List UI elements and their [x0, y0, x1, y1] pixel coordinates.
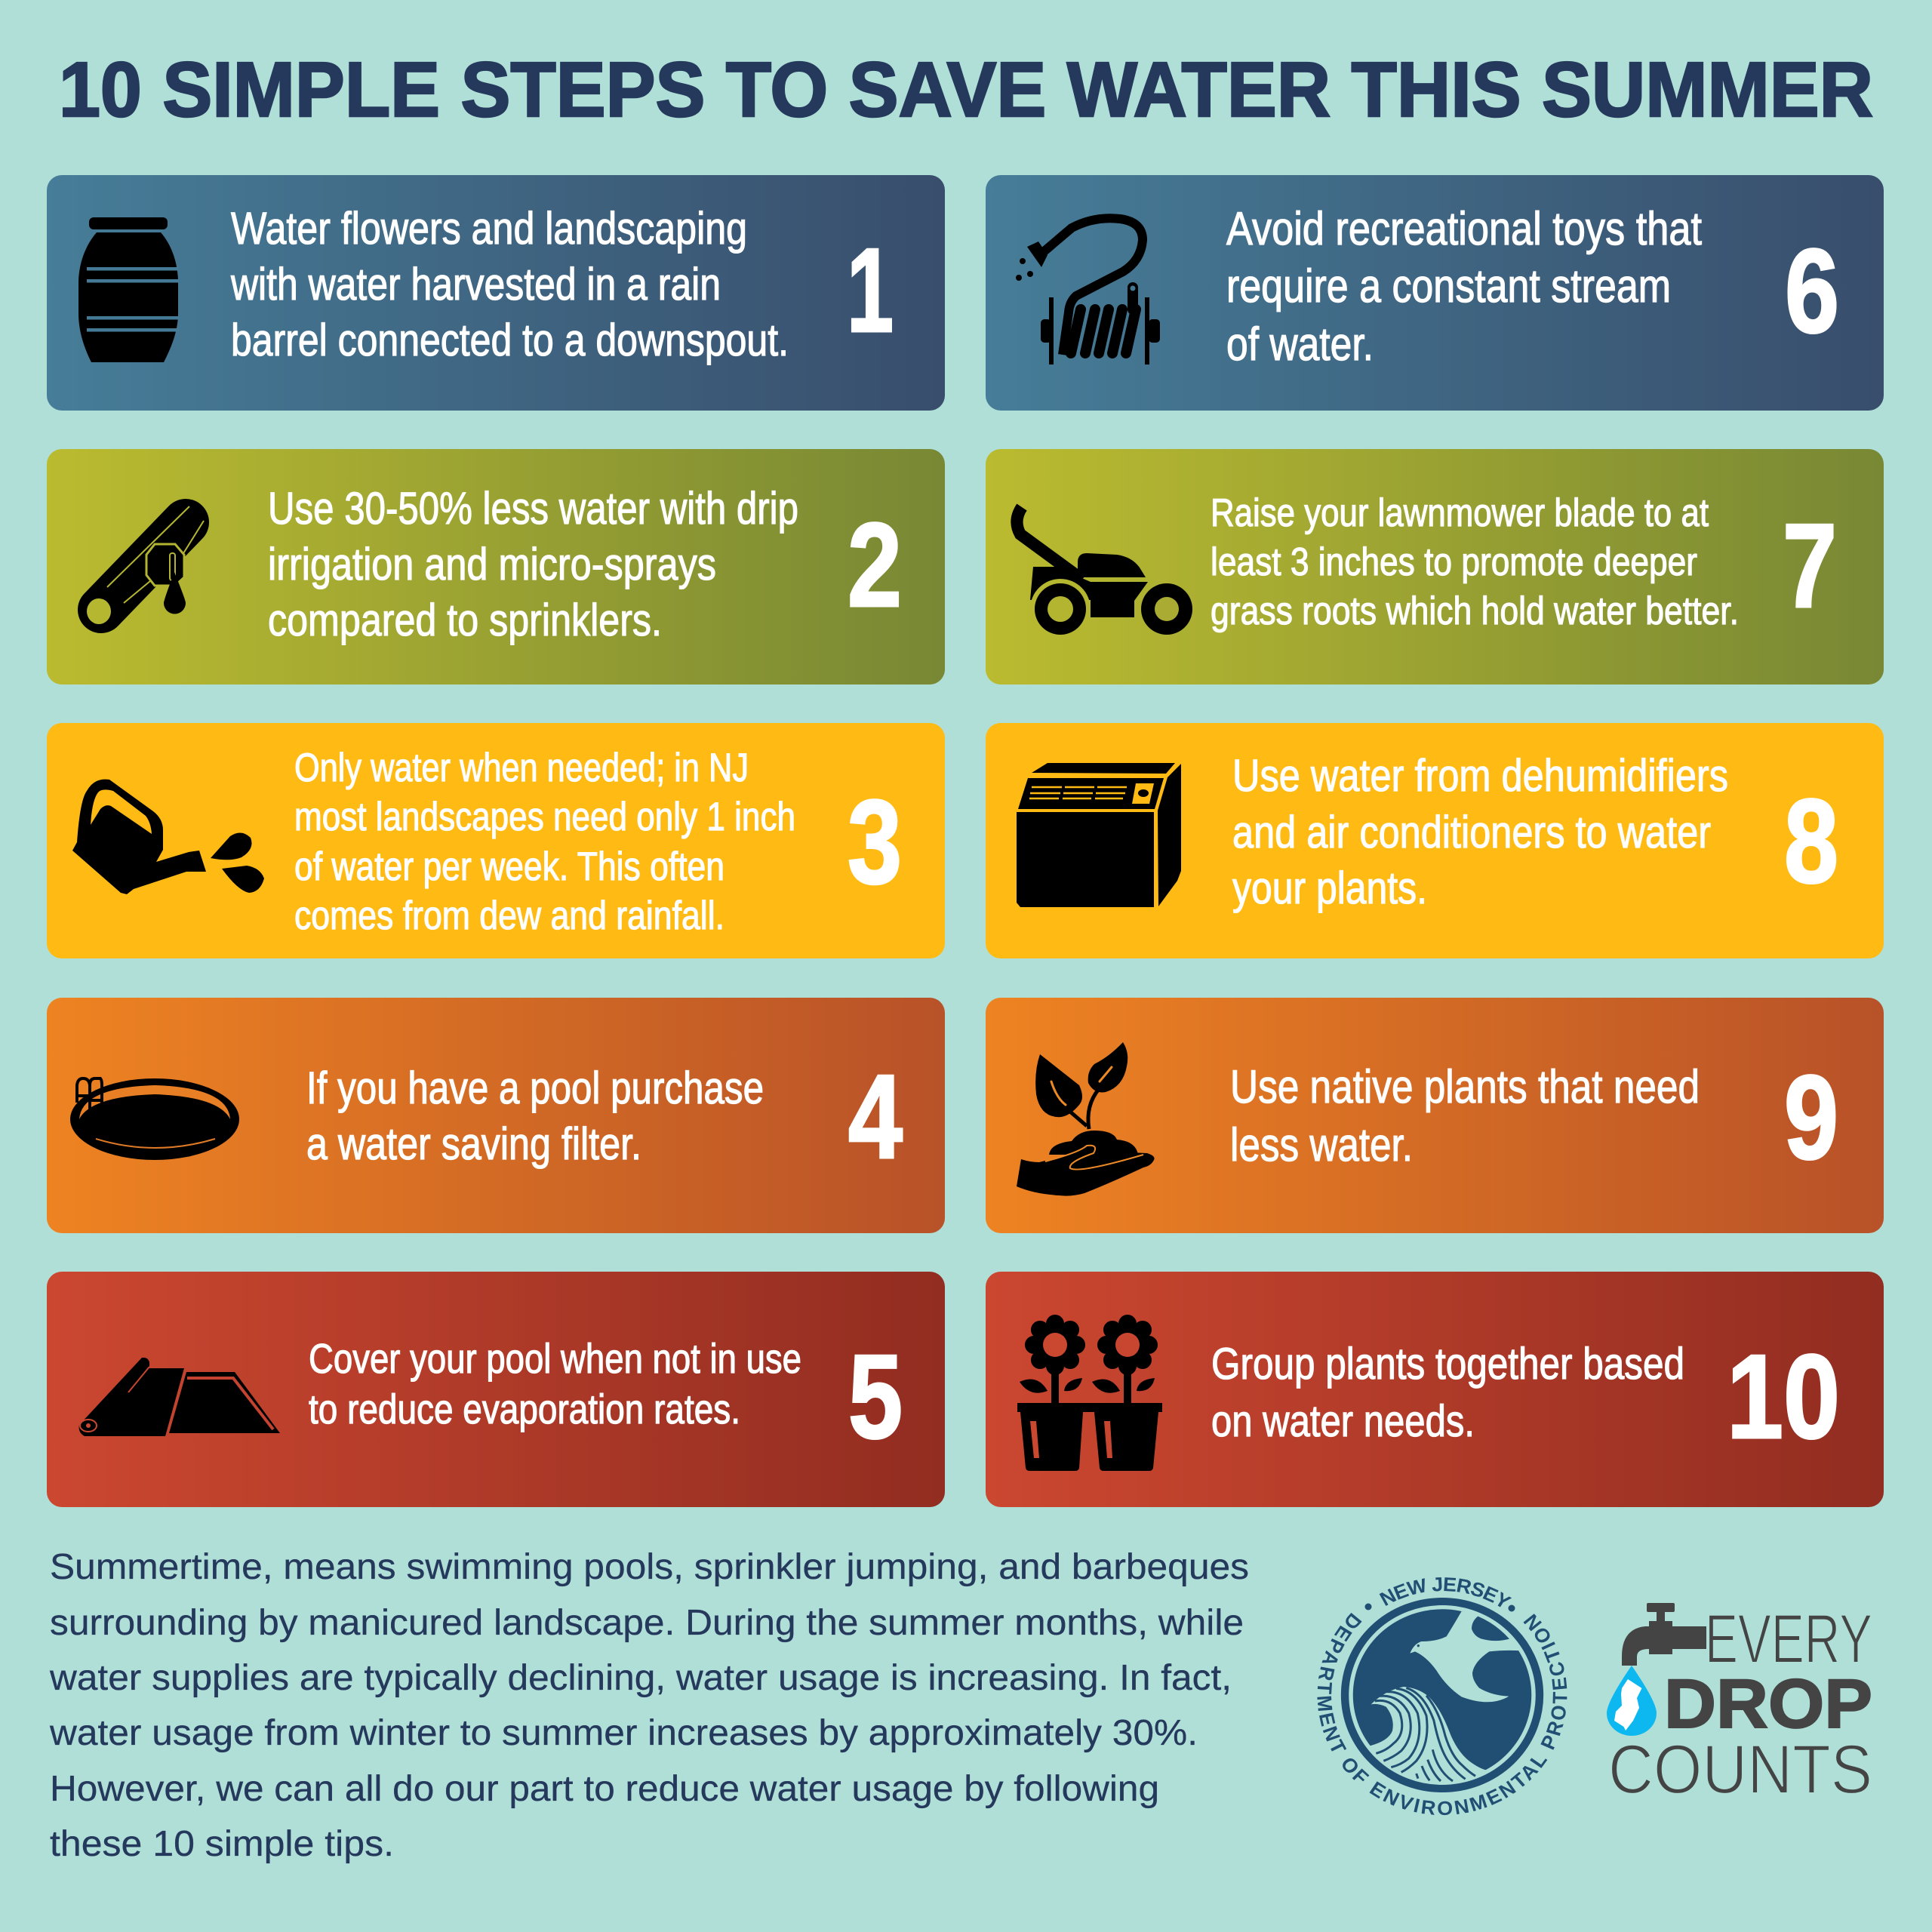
number 2: 2	[848, 499, 902, 632]
panel: step 1 rain barrel	[47, 175, 945, 411]
step 5 text: Cover your pool when not in use	[309, 1335, 801, 1382]
intro paragraph: surrounding by manicured landscape. During the summer months, while	[50, 1603, 1244, 1643]
number 8: 8	[1784, 775, 1838, 908]
step 8 text	[1232, 750, 1728, 913]
step 7 text: least 3 inches to promote deeper	[1211, 540, 1697, 584]
panel: step 5 pool cover	[47, 1272, 945, 1507]
step 2 text	[268, 483, 798, 645]
icon: hose reel	[1016, 218, 1160, 365]
step 2 text: Use 30-50% less water with drip	[268, 483, 798, 534]
step 2 text: irrigation and micro-sprays	[268, 539, 716, 589]
step 3 text	[294, 746, 795, 938]
logo: NJ Department of Environmental Protection seal: DEPARTMENT OF ENVIRONMENTAL PROTECTION	[1317, 1613, 1567, 1816]
wordmark: EVERY	[1705, 1601, 1872, 1678]
panel: step 3 water when needed	[47, 723, 945, 958]
panel: step 6 avoid water toys	[986, 175, 1884, 411]
step 1 text: barrel connected to a downspout.	[231, 315, 789, 365]
number 7: 7	[1783, 500, 1837, 632]
step 6 text	[1226, 203, 1702, 371]
step 7 text	[1211, 491, 1739, 633]
intro paragraph: Summertime, means swimming pools, sprinkler jumping, and barbeques	[50, 1547, 1249, 1587]
step 1 text	[230, 203, 789, 365]
step 5 text	[309, 1335, 801, 1432]
step 8 text: Use water from dehumidifiers	[1232, 750, 1728, 801]
panel: step 9 native plants	[986, 998, 1884, 1233]
number 4: 4	[848, 1051, 903, 1183]
icon: pool cover	[79, 1358, 280, 1436]
panel: step 4 pool filter	[47, 998, 945, 1233]
number 5: 5	[848, 1331, 903, 1463]
intro paragraph: water usage from winter to summer increases by approximately 30%.	[49, 1713, 1198, 1753]
icon: pool	[70, 1078, 239, 1160]
panel: step 7 raise mower blade	[986, 449, 1884, 685]
step 4 text: a water saving filter.	[306, 1118, 641, 1169]
step 9 text: Use native plants that need	[1230, 1061, 1700, 1113]
step 6 text: of water.	[1226, 318, 1374, 371]
panel: step 10 group plants	[986, 1272, 1884, 1507]
step 6 text: require a constant stream	[1226, 260, 1671, 312]
intro paragraph: these 10 simple tips.	[50, 1824, 394, 1864]
step 9 text: less water.	[1230, 1119, 1413, 1171]
icon: potted flowers	[1017, 1315, 1162, 1471]
icon: plant in hand	[1017, 1042, 1155, 1196]
step 3 text: comes from dew and rainfall.	[294, 894, 724, 938]
icon: drip pipe	[87, 506, 204, 624]
step 5 text: to reduce evaporation rates.	[309, 1386, 740, 1432]
step 6 text: Avoid recreational toys that	[1226, 203, 1702, 255]
step 3 text: Only water when needed; in NJ	[294, 746, 749, 790]
number 6: 6	[1785, 225, 1839, 358]
step 9 text	[1230, 1061, 1700, 1171]
wordmark	[1608, 1601, 1872, 1808]
step 10 text: on water needs.	[1211, 1396, 1475, 1446]
intro paragraph: However, we can all do our part to reduce water usage by following	[50, 1769, 1159, 1809]
panel: step 2 drip irrigation	[47, 449, 945, 685]
step 1 text: Water flowers and landscaping	[231, 203, 747, 254]
step 2 text: compared to sprinklers.	[268, 595, 662, 645]
panel: step 8 dehumidifier water	[986, 723, 1884, 958]
icon: watering can	[72, 780, 264, 894]
intro paragraph	[49, 1547, 1249, 1864]
number 3: 3	[848, 776, 902, 909]
step 3 text: most landscapes need only 1 inch	[294, 795, 795, 839]
step 8 text: and air conditioners to water	[1232, 807, 1711, 857]
intro paragraph: water supplies are typically declining, water usage is increasing. In fact,	[49, 1658, 1232, 1698]
step 7 text: Raise your lawnmower blade to at	[1211, 491, 1709, 535]
step 3 text: of water per week. This often	[294, 844, 724, 889]
icon: rain barrel	[78, 217, 179, 362]
step 10 text: Group plants together based	[1211, 1339, 1684, 1389]
icon: water drop with New Jersey	[1607, 1666, 1657, 1736]
wordmark: COUNTS	[1608, 1731, 1872, 1808]
icon: air conditioner	[1017, 763, 1181, 907]
step 1 text: with water harvested in a rain	[230, 259, 721, 309]
number 1: 1	[847, 224, 894, 357]
icon: lawnmower	[1017, 507, 1196, 639]
icon: faucet	[1622, 1603, 1706, 1666]
step 4 text: If you have a pool purchase	[306, 1063, 764, 1113]
logo: NJ Department of Environmental Protection seal: NEW JERSEY	[1380, 1577, 1512, 1607]
step 4 text	[306, 1063, 764, 1169]
number 10: 10	[1727, 1331, 1840, 1463]
step 8 text: your plants.	[1232, 863, 1427, 913]
step 10 text	[1211, 1339, 1684, 1446]
title: 10 SIMPLE STEPS TO SAVE WATER THIS SUMMER	[59, 46, 1873, 133]
number 9: 9	[1784, 1051, 1838, 1184]
wordmark: DROP	[1664, 1666, 1872, 1743]
logo: Every Drop Counts	[1607, 1601, 1872, 1808]
step 7 text: grass roots which hold water better.	[1211, 589, 1739, 633]
